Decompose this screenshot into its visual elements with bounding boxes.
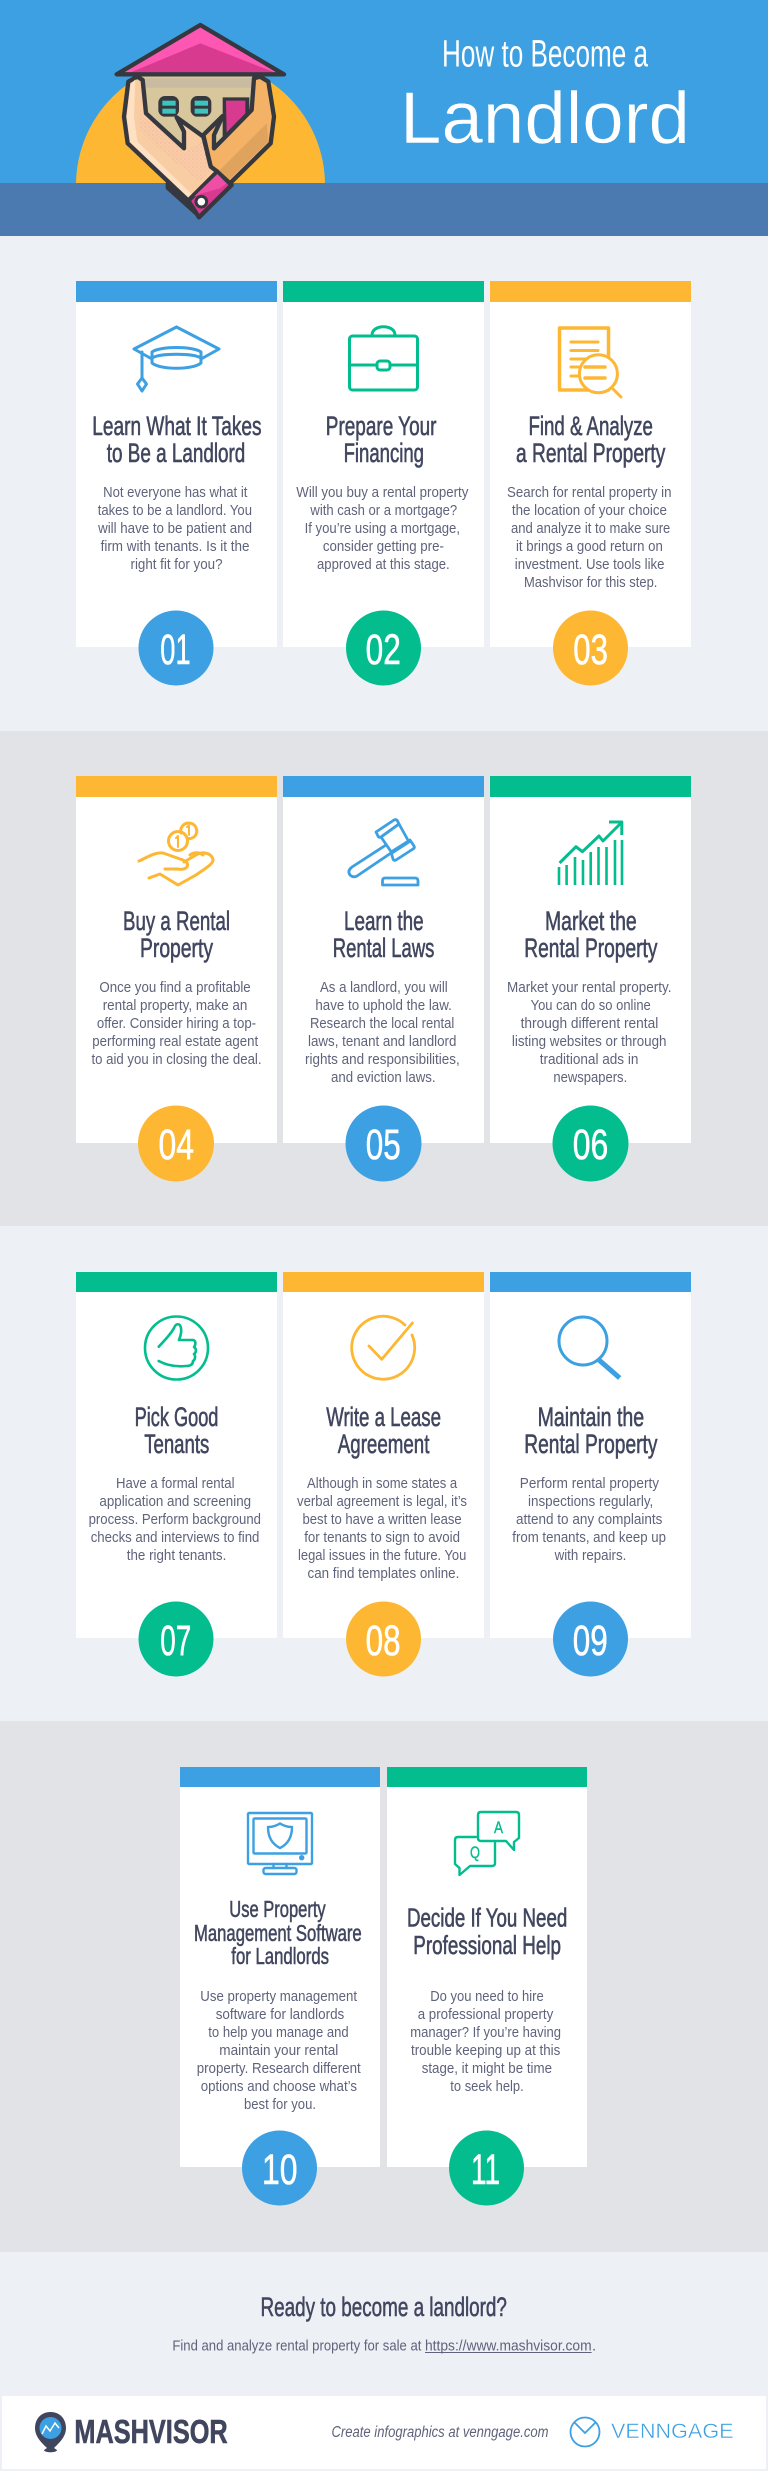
footer bar xyxy=(2,2396,766,2469)
icon: hand with coins xyxy=(139,823,213,885)
body text: and eviction laws. xyxy=(331,1069,436,1086)
body text: rights and responsibilities, xyxy=(305,1051,460,1068)
logo: venngage: VENNGAGE xyxy=(611,2420,734,2443)
number badge 04: 04 xyxy=(158,1121,194,1169)
header banner xyxy=(0,0,768,236)
number badge 07: 07 xyxy=(160,1617,191,1665)
body text: options and choose what’s xyxy=(201,2078,357,2095)
number badge 03 xyxy=(553,610,628,686)
body text: the location of your choice xyxy=(512,502,667,519)
body text xyxy=(410,1988,561,2095)
icon: briefcase xyxy=(350,327,418,390)
heading: Maintain the xyxy=(538,1402,644,1432)
panel: step 2 xyxy=(283,281,484,686)
icon: hands holding house xyxy=(117,25,284,217)
heading xyxy=(194,1896,362,1969)
body text: Use property management xyxy=(200,1988,358,2005)
body text: a professional property xyxy=(418,2006,554,2023)
body text: attend to any complaints xyxy=(516,1511,662,1528)
number badge 01 xyxy=(138,610,214,686)
body text: takes to be a landlord. You xyxy=(98,502,252,519)
logo: mashvisor xyxy=(35,2412,228,2452)
body text: consider getting pre- xyxy=(323,538,444,555)
body text: stage, it might be time xyxy=(422,2060,552,2077)
panel: step 8 xyxy=(283,1272,484,1676)
body text: offer. Consider hiring a top- xyxy=(97,1015,256,1032)
body text: to help you manage and xyxy=(208,2024,349,2041)
body text: software for landlords xyxy=(216,2006,344,2023)
body text: Mashvisor for this step. xyxy=(524,574,657,591)
panel: step 7 xyxy=(76,1272,277,1676)
number badge 06: 06 xyxy=(573,1121,608,1169)
heading: Learn the xyxy=(344,906,424,936)
icon: gavel xyxy=(349,820,418,885)
number badge 10: 10 xyxy=(262,2146,298,2194)
heading: Rental Property xyxy=(524,1429,658,1459)
number badge 03: 03 xyxy=(573,626,608,674)
heading: Buy a Rental xyxy=(123,906,230,936)
icon: growth chart xyxy=(559,822,622,885)
heading: Prepare Your xyxy=(326,411,437,441)
body text: rental property, make an xyxy=(103,997,247,1014)
body text: the right tenants. xyxy=(127,1547,226,1564)
heading: Use Property xyxy=(229,1896,326,1922)
call to action text: Find and analyze rental property for sale at xyxy=(172,2338,422,2354)
body text: You can do so online xyxy=(531,997,651,1014)
body text: As a landlord, you will xyxy=(320,979,448,996)
body text xyxy=(512,1475,666,1564)
section background: steps 4-6 xyxy=(0,731,768,1226)
title: how to become a: How to Become a xyxy=(442,34,649,76)
number badge 02 xyxy=(346,610,421,686)
logo: venngage xyxy=(570,2418,734,2446)
number badge 02: 02 xyxy=(366,626,401,674)
call to action text: https://www.mashvisor.com xyxy=(425,2338,592,2354)
heading: Decide If You Need xyxy=(407,1903,567,1933)
body text: Have a formal rental xyxy=(116,1475,234,1492)
body text: for tenants to sign to avoid xyxy=(304,1529,460,1546)
body text: Search for rental property in xyxy=(507,484,672,501)
panel: step 4 xyxy=(76,776,277,1182)
body text: If you’re using a mortgage, xyxy=(305,520,460,537)
number badge 01: 01 xyxy=(160,626,191,674)
body text: to seek help. xyxy=(450,2078,524,2095)
number badge 11 xyxy=(449,2130,524,2206)
body text: inspections regularly, xyxy=(528,1493,653,1510)
panel: step 5 xyxy=(283,776,484,1182)
call to action heading: Ready to become a landlord? xyxy=(260,2292,507,2322)
body text: and analyze it to make sure xyxy=(511,520,670,537)
body text: from tenants, and keep up xyxy=(512,1529,666,1546)
body text: laws, tenant and landlord xyxy=(308,1033,456,1050)
body text: Perform rental property xyxy=(520,1475,659,1492)
body text: maintain your rental xyxy=(219,2042,338,2059)
body text xyxy=(89,1475,261,1564)
section background: steps 1-3 xyxy=(0,236,768,731)
body text: can find templates online. xyxy=(308,1565,459,1582)
heading: a Rental Property xyxy=(516,438,666,468)
body text: verbal agreement is legal, it’s xyxy=(297,1493,467,1510)
body text: Do you need to hire xyxy=(430,1988,544,2005)
panel: step 3 xyxy=(490,281,691,686)
body text: property. Research different xyxy=(197,2060,361,2077)
body text: trouble keeping up at this xyxy=(411,2042,560,2059)
heading: Property xyxy=(140,933,213,963)
icon: monitor with shield xyxy=(248,1813,312,1874)
body text xyxy=(97,484,252,573)
heading xyxy=(333,906,434,963)
section background: steps 10-11 xyxy=(0,1721,768,2252)
body text: Although in some states a xyxy=(307,1475,458,1492)
heading xyxy=(326,1402,441,1459)
icon: yellow sun xyxy=(76,76,325,183)
body text xyxy=(197,1988,361,2113)
heading: Financing xyxy=(344,438,424,468)
body text: approved at this stage. xyxy=(317,556,450,573)
icon: question and answer bubbles: A xyxy=(494,1818,504,1837)
heading xyxy=(516,411,666,468)
body text xyxy=(296,484,469,573)
heading: Agreement xyxy=(338,1429,430,1459)
body text: manager? If you’re having xyxy=(410,2024,561,2041)
body text: right fit for you? xyxy=(130,556,222,573)
body text: Research the local rental xyxy=(310,1015,454,1032)
section background: steps 7-9 xyxy=(0,1226,768,1721)
body text: to aid you in closing the deal. xyxy=(92,1051,262,1068)
body text: with cash or a mortgage? xyxy=(310,502,457,519)
heading: Professional Help xyxy=(413,1930,561,1960)
body text: best to have a written lease xyxy=(302,1511,462,1528)
panel: step 9 xyxy=(490,1272,691,1676)
number badge 05: 05 xyxy=(366,1121,401,1169)
heading xyxy=(326,411,437,468)
icon: question and answer bubbles xyxy=(455,1812,519,1875)
icon: question and answer bubbles: Q xyxy=(470,1843,480,1862)
heading: Rental Property xyxy=(524,933,658,963)
heading: Rental Laws xyxy=(333,933,434,963)
body text xyxy=(297,1475,467,1582)
logo: mashvisor: MASHVISOR xyxy=(74,2413,228,2450)
icon: document with magnifier xyxy=(560,328,621,397)
number badge 11: 11 xyxy=(471,2146,500,2194)
icon: graduation cap xyxy=(134,327,219,391)
heading: to Be a Landlord xyxy=(107,438,245,468)
heading xyxy=(92,411,262,468)
body text: listing websites or through xyxy=(512,1033,666,1050)
panel: step 6 xyxy=(490,776,691,1182)
heading xyxy=(123,906,230,963)
heading: Management Software xyxy=(194,1920,362,1946)
body text: traditional ads in xyxy=(540,1051,638,1068)
body text: checks and interviews to find xyxy=(91,1529,259,1546)
heading: for Landlords xyxy=(231,1943,329,1969)
body text: process. Perform background xyxy=(89,1511,261,1528)
heading: Tenants xyxy=(144,1429,209,1459)
body text xyxy=(507,484,672,591)
heading xyxy=(407,1903,567,1960)
number badge 06 xyxy=(552,1106,628,1182)
icon: thumbs up xyxy=(145,1316,208,1380)
number badge 07 xyxy=(138,1602,214,1676)
number badge 10 xyxy=(242,2130,317,2206)
heading: Pick Good xyxy=(135,1402,218,1432)
number badge 05 xyxy=(346,1106,422,1182)
heading xyxy=(524,1402,658,1459)
body text: Not everyone has what it xyxy=(103,484,248,501)
body text: have to uphold the law. xyxy=(315,997,452,1014)
body text xyxy=(92,979,262,1068)
number badge 08 xyxy=(346,1602,421,1676)
number badge 08: 08 xyxy=(366,1617,401,1665)
body text: best for you. xyxy=(244,2096,316,2113)
heading: Market the xyxy=(545,906,637,936)
number badge 09: 09 xyxy=(573,1617,608,1665)
body text: firm with tenants. Is it the xyxy=(101,538,249,555)
heading: Learn What It Takes xyxy=(92,411,262,441)
heading xyxy=(524,906,658,963)
body text: Will you buy a rental property xyxy=(296,484,469,501)
icon: check mark in circle xyxy=(352,1316,415,1379)
body text: it brings a good return on xyxy=(516,538,663,555)
heading xyxy=(135,1402,218,1459)
call to action text xyxy=(172,2338,596,2354)
panel: step 11 xyxy=(387,1767,587,2206)
panel: step 1 xyxy=(76,281,277,686)
heading: Write a Lease xyxy=(326,1402,441,1432)
title: landlord: Landlord xyxy=(400,78,690,159)
body text: legal issues in the future. You xyxy=(298,1547,466,1564)
number badge 09 xyxy=(553,1602,628,1676)
body text: application and screening xyxy=(99,1493,251,1510)
body text: investment. Use tools like xyxy=(515,556,664,573)
icon: magnifying glass xyxy=(559,1317,620,1378)
body text: with repairs. xyxy=(554,1547,626,1564)
body text: will have to be patient and xyxy=(97,520,252,537)
number badge 04 xyxy=(138,1106,214,1182)
body text xyxy=(305,979,460,1086)
body text: performing real estate agent xyxy=(92,1033,259,1050)
body text: newspapers. xyxy=(553,1069,627,1086)
body text: Market your rental property. xyxy=(507,979,672,996)
body text: through different rental xyxy=(521,1015,658,1032)
panel: step 10 xyxy=(180,1767,380,2206)
body text: Once you find a profitable xyxy=(99,979,251,996)
credit text: Create infographics at venngage.com xyxy=(332,2424,549,2441)
body text xyxy=(507,979,672,1086)
heading: Find & Analyze xyxy=(528,411,653,441)
call to action text: . xyxy=(592,2338,596,2354)
section background: call to action xyxy=(0,2252,768,2471)
